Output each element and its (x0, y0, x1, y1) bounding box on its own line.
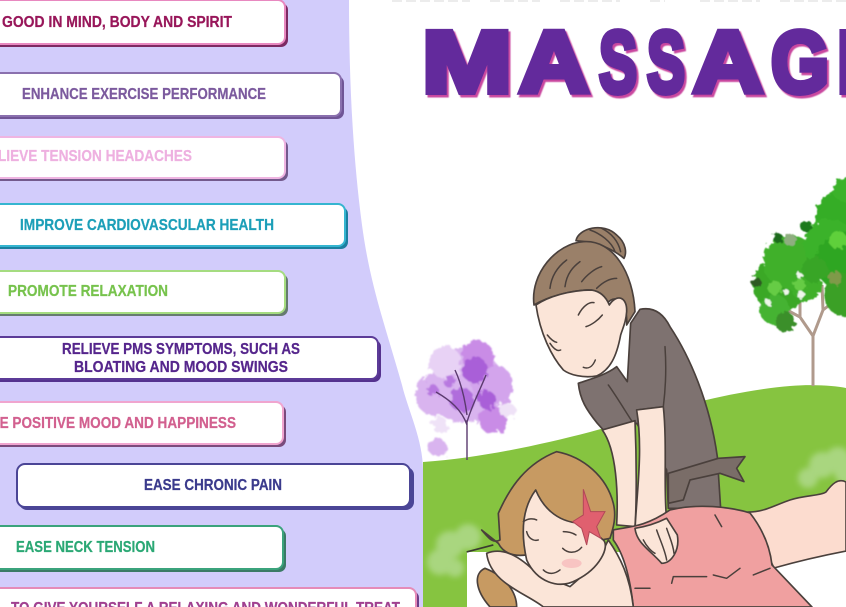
icon: purple tree (415, 341, 515, 460)
icon: green tree (751, 178, 846, 386)
button: relieve pms symptoms: RELIEVE PMS SYMPTOMS, SUCH AS (62, 341, 300, 358)
icon: pale leaves bottom left (427, 524, 481, 577)
masseuse (534, 228, 745, 563)
client arm and shoulder (487, 540, 633, 607)
hair strands (550, 260, 617, 288)
button: ease neck tension (0, 526, 286, 572)
client towel (613, 506, 812, 607)
button: relieve pms symptoms: BLOATING AND MOOD SWINGS (74, 359, 288, 376)
illustration: client legs (748, 481, 846, 568)
button: promote relaxation: PROMOTE RELAXATION (8, 283, 168, 300)
button: ease chronic pain (17, 464, 414, 510)
title: massage: G (771, 14, 829, 111)
face (536, 290, 627, 377)
icon: pale leaves right (798, 447, 846, 488)
icon: hair flower (573, 489, 605, 545)
masseuse hand on towel (635, 518, 678, 563)
title: massage (422, 14, 846, 111)
left arm (602, 421, 636, 527)
button: positive mood and happiness (0, 402, 286, 447)
shirt (578, 309, 721, 508)
hair (534, 242, 635, 325)
illustration: green hill (423, 385, 846, 607)
decoration: faint heading remains (392, 0, 846, 2)
button: ease neck tension: EASE NECK TENSION (16, 539, 155, 556)
button: give yourself a treat (0, 588, 419, 607)
button: improve cardiovascular health (0, 204, 348, 249)
illustration: massage table sheet (467, 552, 846, 607)
button: enhance exercise performance (0, 73, 344, 119)
towel folds (635, 515, 770, 588)
client hair tail (477, 568, 517, 607)
shirt folds (608, 347, 666, 423)
title: massage: S (599, 14, 637, 111)
belt (668, 457, 745, 503)
illustration: massage scene (467, 228, 812, 607)
client face (523, 490, 605, 584)
right arm (635, 407, 678, 563)
client blush (562, 559, 582, 568)
client face features (523, 519, 582, 573)
button: improve cardiovascular health: IMPROVE CARDIOVASCULAR HEALTH (20, 217, 274, 234)
button: ease chronic pain: EASE CHRONIC PAIN (144, 477, 282, 494)
panel: benefit buttons (0, 0, 419, 607)
hair bun (576, 228, 625, 258)
client hair back (482, 452, 615, 555)
title: massage: A (519, 14, 589, 111)
button: promote relaxation (0, 271, 288, 316)
panel: benefits list background (0, 0, 423, 607)
title: massage: S (647, 14, 685, 111)
title: massage: M (422, 14, 512, 111)
button: relieve tension headaches (0, 137, 288, 181)
button: good in mind, body and spirit: GOOD IN MIND, BODY AND SPIRIT (2, 14, 232, 31)
masseuse face features (547, 302, 602, 368)
finger lines (643, 528, 674, 560)
bun lines (590, 228, 621, 252)
sheet edge line (467, 545, 493, 552)
title: massage: A (693, 14, 763, 111)
button: good in mind, body and spirit (0, 0, 288, 47)
button: relieve pms symptoms (0, 337, 381, 382)
button: enhance exercise performance: ENHANCE EXERCISE PERFORMANCE (22, 86, 266, 103)
